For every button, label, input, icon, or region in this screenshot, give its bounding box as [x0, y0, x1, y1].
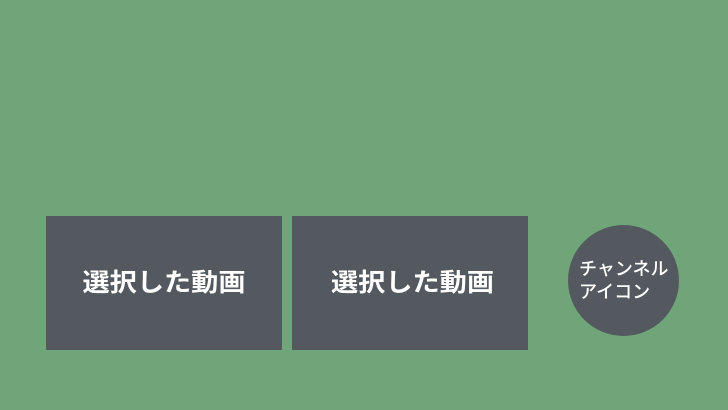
panel: selected video 1: 選択した動画 — [82, 268, 246, 296]
panel: channel icon circle: アイコン — [579, 282, 650, 302]
panel: channel icon circle: チャンネル — [579, 259, 668, 279]
panel: selected video 2 — [292, 216, 528, 350]
panel: selected video 2: 選択した動画 — [331, 268, 494, 296]
panel: channel icon circle — [568, 225, 679, 336]
panel: selected video 1 — [46, 216, 282, 350]
